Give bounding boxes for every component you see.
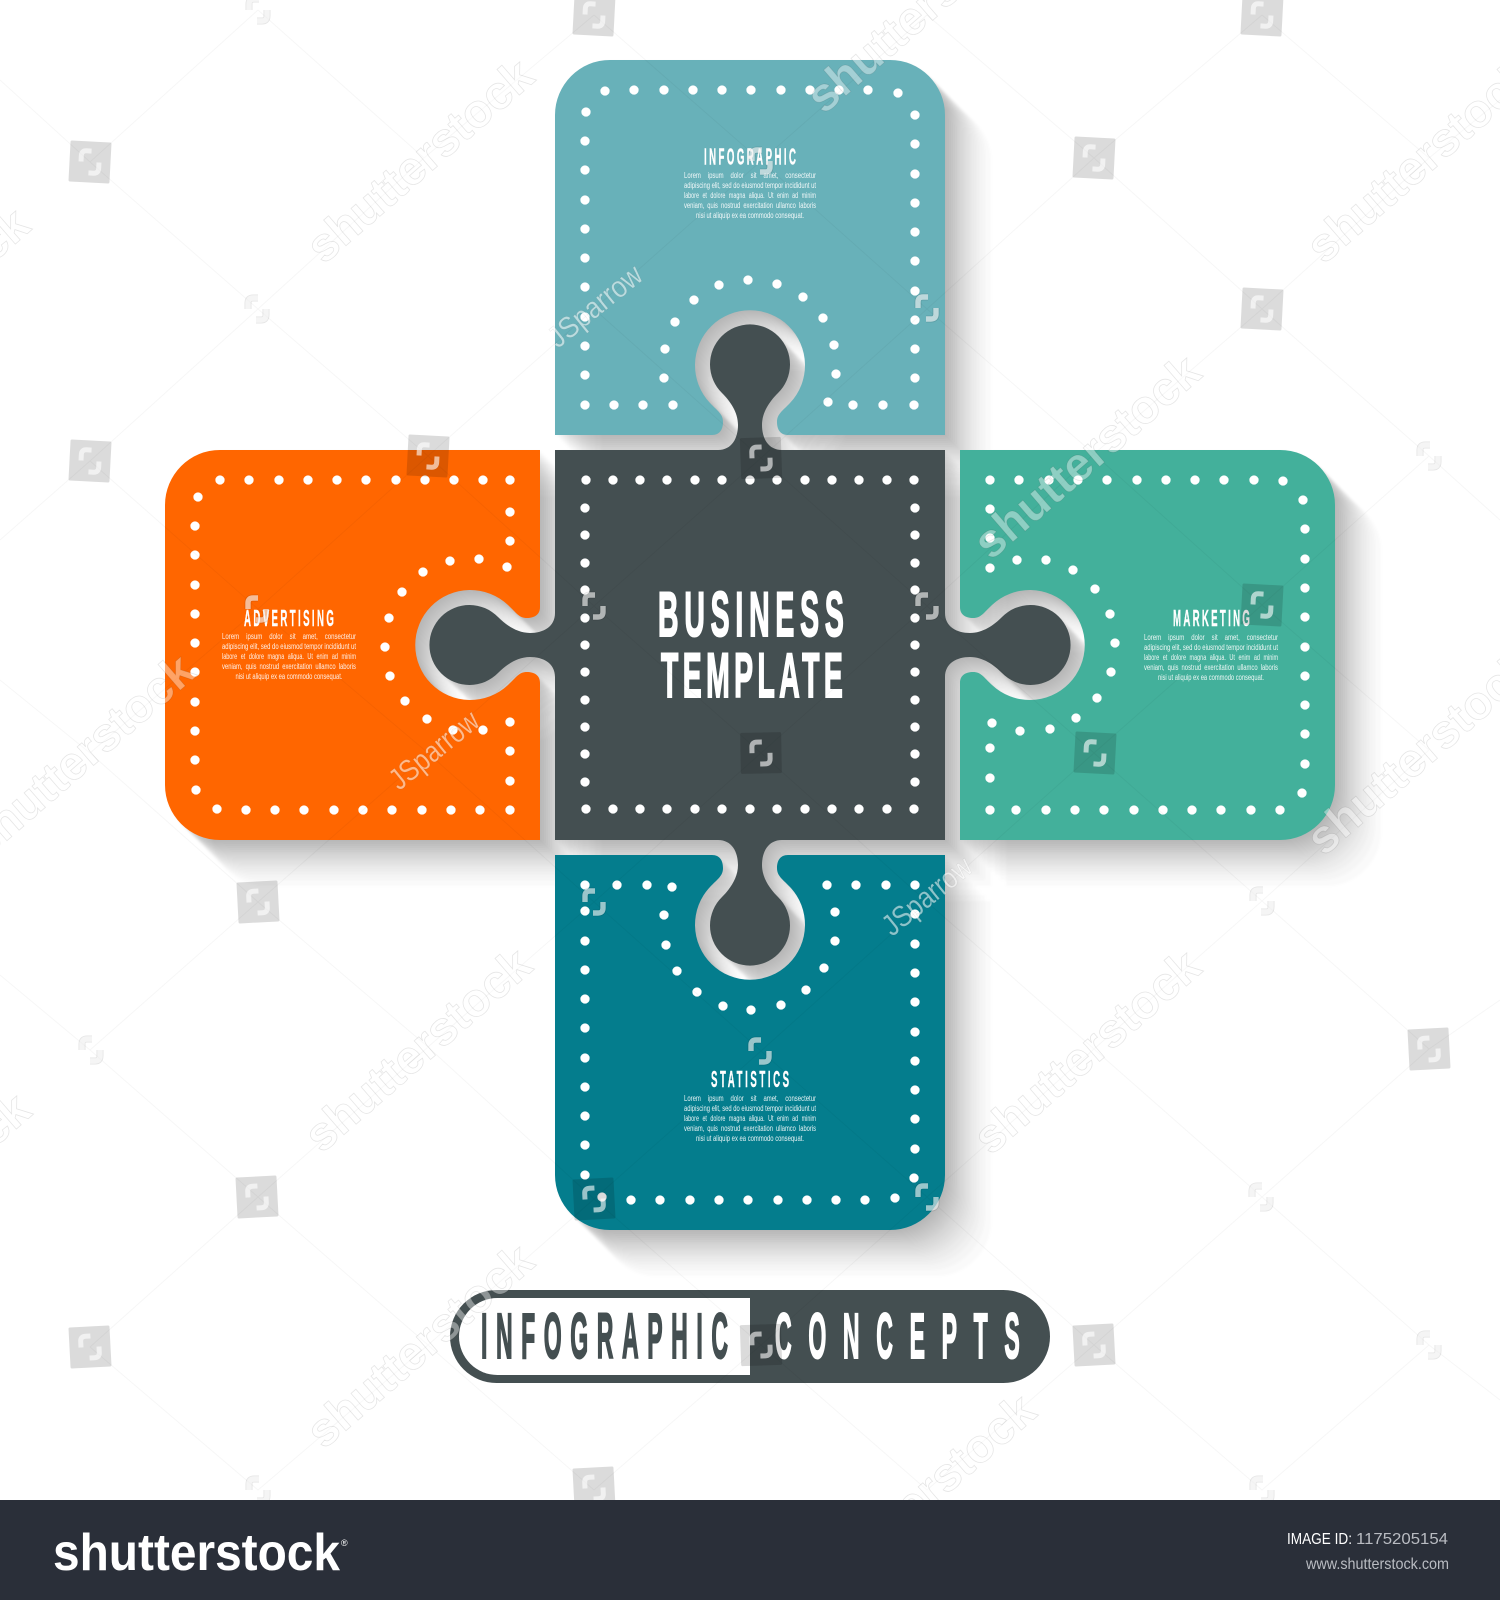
text block: left: adipiscing elit, sed do eiusmod tempor incididunt ut — [222, 642, 357, 651]
dotted outline: center — [585, 480, 915, 809]
text block: left: labore et dolore magna aliqua. Ut enim ad minim — [222, 652, 356, 661]
footer logo: registered mark: ® — [341, 1538, 348, 1548]
text block: top — [684, 171, 817, 220]
text block: right: adipiscing elit, sed do eiusmod tempor incididunt ut — [1144, 643, 1279, 652]
footer bar — [0, 1500, 1500, 1600]
banner text: concepts: CONCEPTS — [775, 1301, 1020, 1373]
watermark: JSparrow credits: JSparrow — [383, 704, 486, 797]
text block: top: adipiscing elit, sed do eiusmod tempor incididunt ut — [684, 181, 817, 190]
text block: right: veniam, quis nostrud exercitation ullamco laboris — [1144, 663, 1278, 672]
text block: bottom: nisi ut aliquip ex ea commodo consequat. — [696, 1134, 804, 1143]
text block: left — [222, 632, 357, 681]
watermark: shutterstock wordmarks: shutterstock — [296, 1232, 544, 1458]
text block: left: nisi ut aliquip ex ea commodo consequat. — [236, 672, 342, 681]
dotted outline: top — [585, 90, 915, 405]
text block: right: nisi ut aliquip ex ea commodo consequat. — [1158, 673, 1264, 682]
pill banner: infographic concepts — [450, 1290, 1050, 1383]
text block: top: labore et dolore magna aliqua. Ut enim ad minim — [684, 191, 816, 200]
heading: infographic: INFOGRAPHIC — [704, 144, 796, 170]
watermark: JSparrow credits: JSparrow — [541, 258, 649, 354]
watermark: JSparrow credits: JSparrow — [876, 850, 979, 943]
watermark: shutterstock wordmarks: shutterstock — [296, 47, 544, 273]
panel: statistics (bottom) — [555, 855, 945, 1230]
heading: advertising: ADVERTISING — [244, 605, 334, 631]
heading: marketing: MARKETING — [1173, 605, 1250, 631]
title: business template: TEMPLATE — [661, 642, 843, 711]
panel: infographic (top) — [555, 60, 945, 435]
text block: bottom: veniam, quis nostrud exercitation ullamco laboris — [684, 1124, 816, 1133]
title: business template — [658, 581, 844, 711]
text block: right: labore et dolore magna aliqua. Ut enim ad minim — [1144, 653, 1278, 662]
footer: image id: IMAGE ID: — [1287, 1531, 1352, 1548]
text block: bottom — [684, 1094, 817, 1143]
text block: right — [1144, 633, 1279, 682]
dotted outline: bottom — [585, 885, 915, 1200]
dotted outline: right — [990, 480, 1305, 810]
footer: image id: 1175205154 — [1356, 1531, 1448, 1548]
watermark: shutterstock wordmarks: shutterstock — [963, 938, 1211, 1164]
text block: top: veniam, quis nostrud exercitation ullamco laboris — [684, 201, 816, 210]
text block: left: veniam, quis nostrud exercitation ullamco laboris — [222, 662, 356, 671]
banner text: infographic: INFOGRAPHIC — [481, 1301, 728, 1373]
footer logo: shutterstock: shutterstock — [53, 1524, 340, 1582]
text block: top: nisi ut aliquip ex ea commodo consequat. — [696, 211, 804, 220]
text block: right: Lorem ipsum dolor sit amet, consectetur — [1144, 633, 1278, 642]
watermark: JSparrow credits — [383, 258, 979, 943]
panel: business template (center) — [429, 324, 1071, 966]
heading: statistics: STATISTICS — [711, 1066, 789, 1092]
title: business template: BUSINESS — [658, 581, 844, 650]
text block: bottom: adipiscing elit, sed do eiusmod tempor incididunt ut — [684, 1104, 817, 1113]
panel: advertising (left) — [165, 450, 540, 840]
watermark: shutterstock wordmarks: shutterstock — [294, 936, 542, 1162]
dotted outline: left — [195, 480, 510, 810]
footer: image id — [1287, 1531, 1448, 1548]
watermark: shutterstock wordmarks: shutterstock — [963, 343, 1211, 569]
text block: bottom: Lorem ipsum dolor sit amet, consectetur — [684, 1094, 816, 1103]
text block: top: Lorem ipsum dolor sit amet, consectetur — [684, 171, 816, 180]
footer: website: www.shutterstock.com — [1305, 1556, 1449, 1573]
text block: left: Lorem ipsum dolor sit amet, consectetur — [222, 632, 356, 641]
text block: bottom: labore et dolore magna aliqua. Ut enim ad minim — [684, 1114, 816, 1123]
panel: marketing (right) — [960, 450, 1335, 840]
long shadows of the puzzle pieces — [166, 61, 1381, 1276]
